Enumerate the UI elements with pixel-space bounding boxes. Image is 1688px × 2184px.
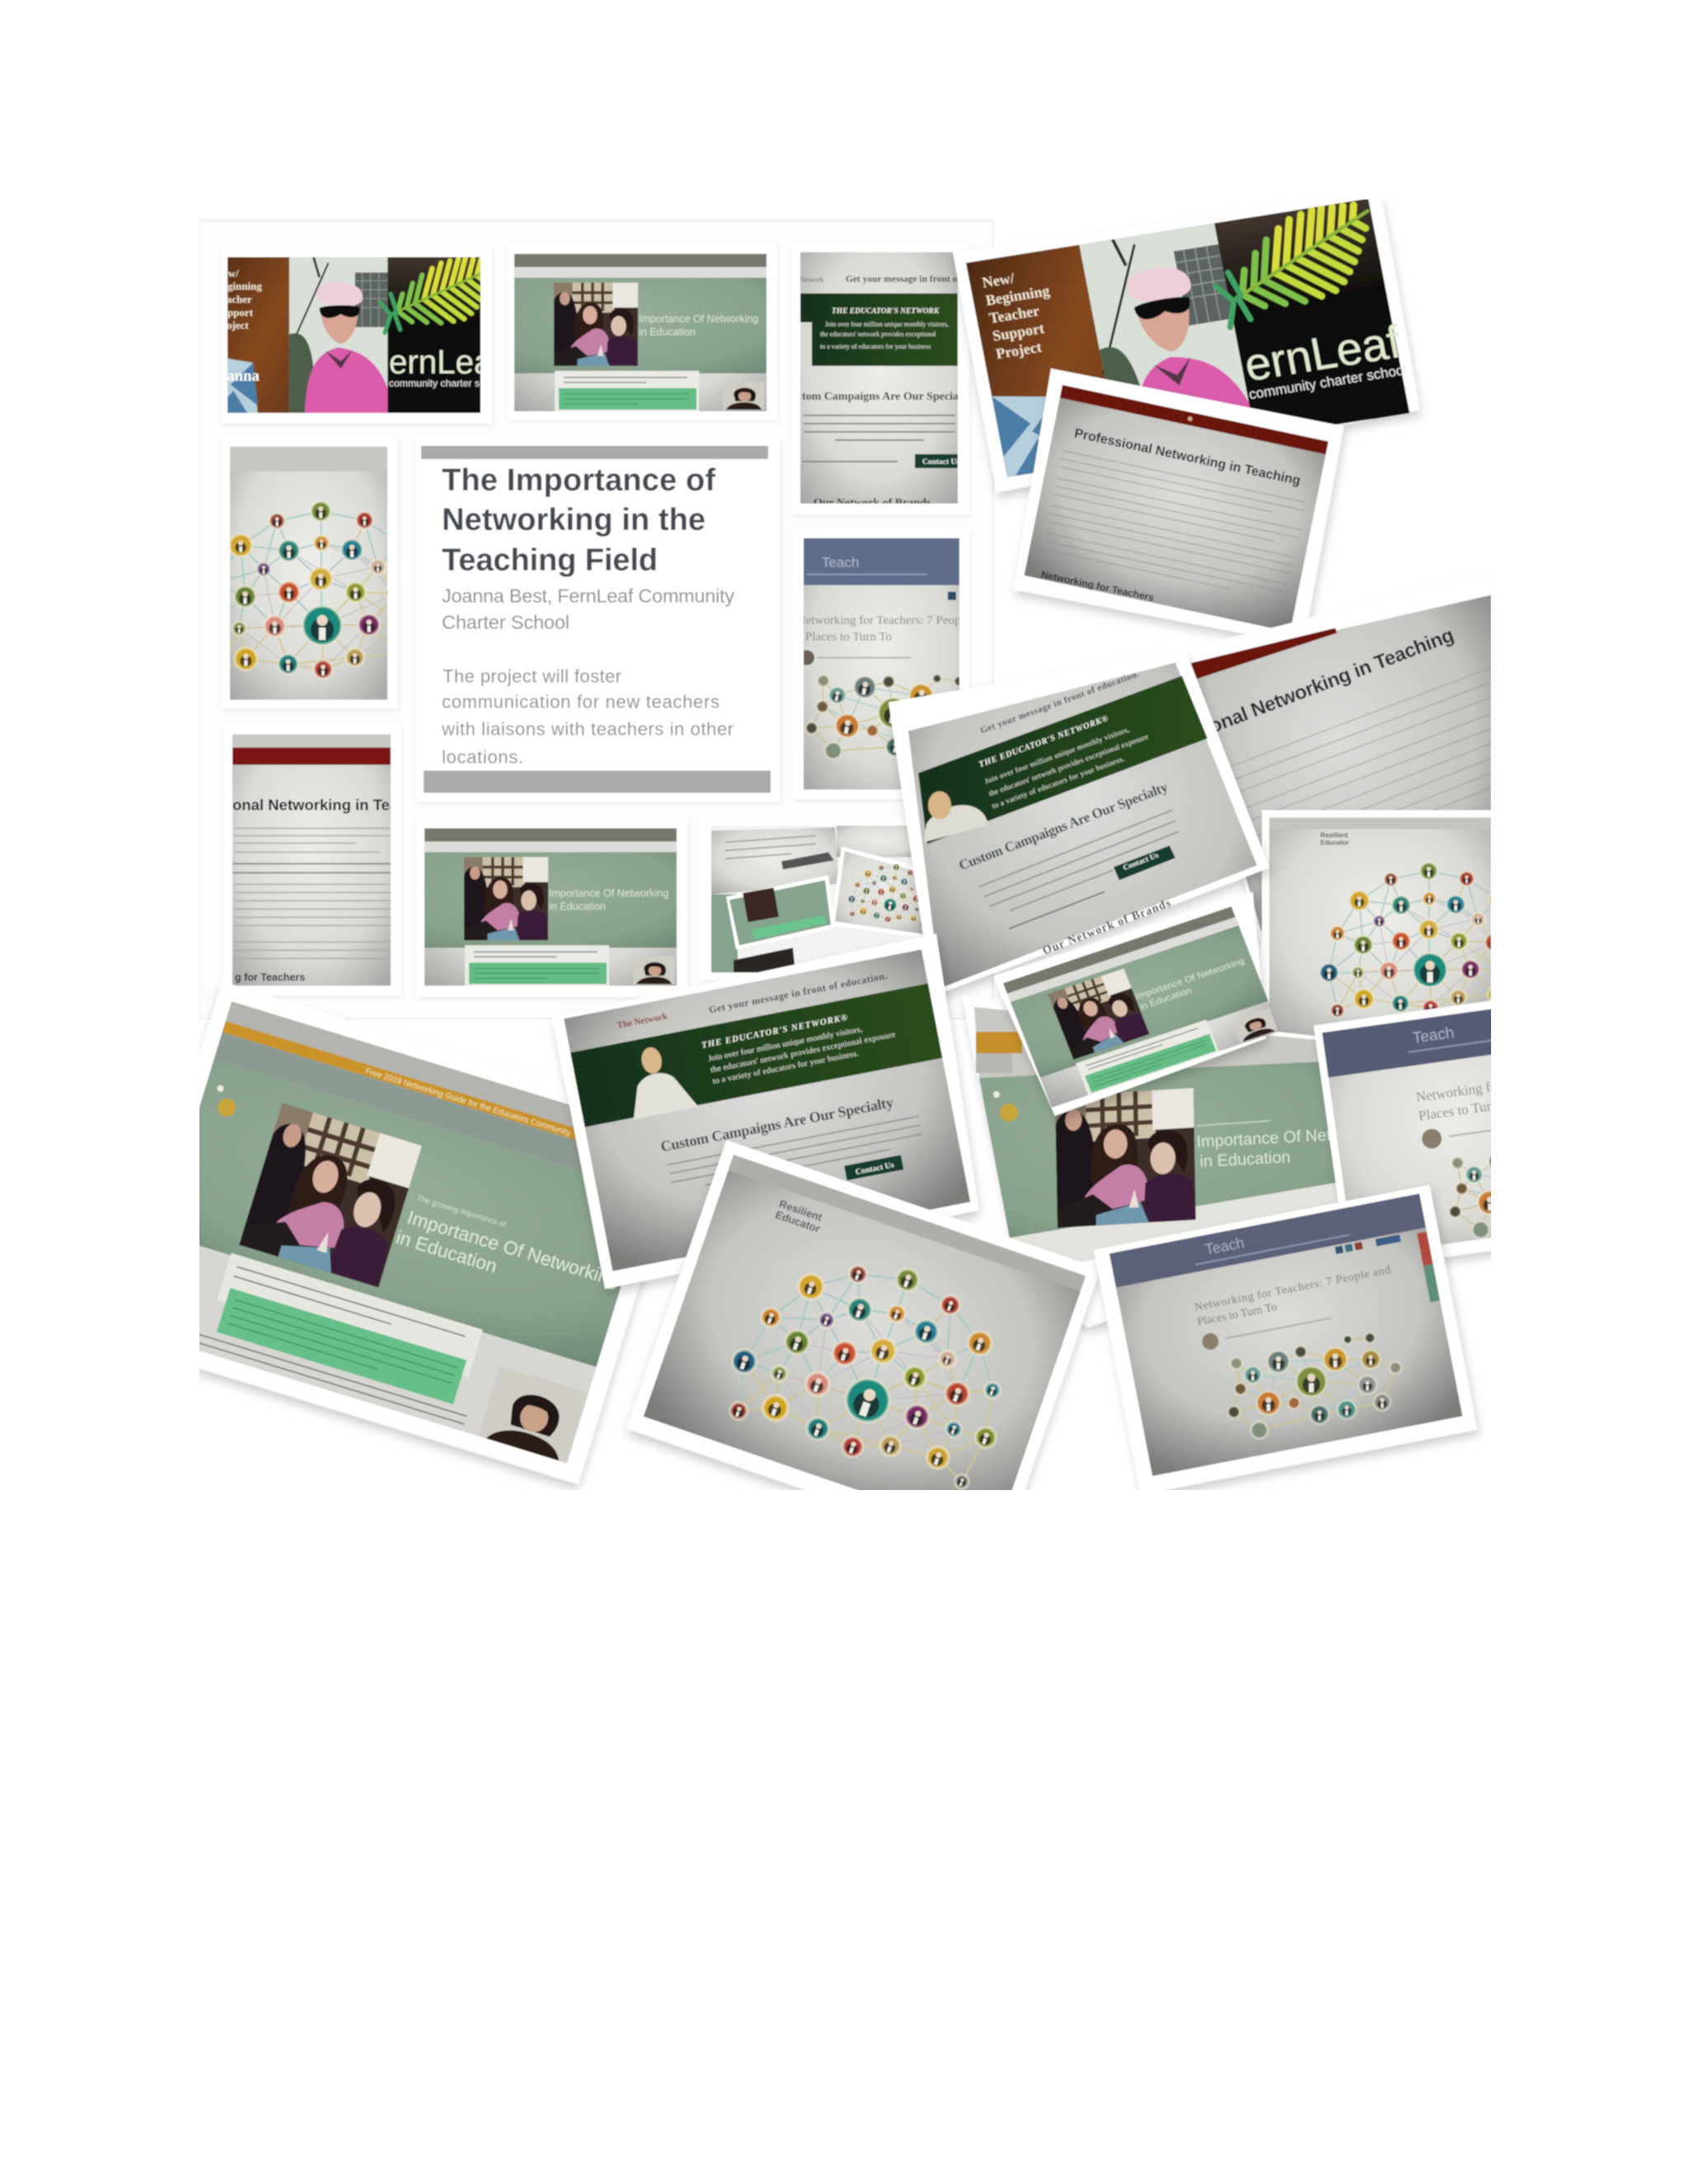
text: project description: with liaisons with teachers in other <box>441 719 734 739</box>
screenshot: The Educator's Network, tilted upper: to a variety of educators for your business. <box>991 754 1125 810</box>
screenshot: Professional Networking in Teaching, large crop: ional Networking in Teaching <box>1201 624 1457 740</box>
screenshot: Networking for Teachers, right: Networking for Teachers: 7 People and <box>1415 1059 1634 1105</box>
screenshot: The Educator's Network, lower tilted: the educators' network provides exceptional exposure <box>710 1030 897 1075</box>
screenshot tile: The Educator's Network, cropped: to a variety of educators for your business <box>820 343 931 350</box>
screenshot: The Educator's Network, lower tilted: Contact Us <box>855 1160 895 1177</box>
screenshot: The Educator's Network, lower tilted: Custom Campaigns Are Our Specialty <box>659 1094 894 1155</box>
screenshot tile: The Educator's Network, cropped: Network <box>800 276 823 284</box>
screenshot tile: The Educator's Network, cropped: tom Campaigns Are Our Specialty <box>802 391 972 403</box>
screenshot: The Educator's Network, lower tilted: THE EDUCATOR'S NETWORK® <box>701 1013 848 1051</box>
panel: base sheet of tiled slides <box>199 220 993 1019</box>
screenshot: The Educator's Network, lower tilted: Get your message in front of education. <box>708 970 889 1015</box>
screenshot: Importance of Networking, large behind: in Education <box>1199 1148 1291 1171</box>
screenshot: Importance of Networking, large behind: Importance Of Networking <box>1196 1123 1388 1151</box>
photo: FernLeaf selfie, tilted: ernLeaf <box>1240 315 1405 391</box>
text: author: Joanna Best, FernLeaf Community <box>442 585 734 607</box>
photo tile: FernLeaf selfie, flat: Joanna <box>212 368 260 385</box>
screenshot tile: Importance of Networking in Education: in Education <box>639 326 696 338</box>
screenshot: large network illustration: Resilient <box>777 1197 824 1224</box>
heading: title <box>442 463 715 578</box>
screenshot: Networking for Teachers, lower tilted: Places to Turn To <box>1196 1301 1278 1329</box>
photo: FernLeaf selfie, tilted: New/ <box>981 269 1016 291</box>
screenshot: The Educator's Network, tilted upper: Our Network of Brands <box>1041 897 1173 958</box>
screenshot: network illustration tile, right: Educator <box>1320 839 1349 846</box>
screenshot: The Educator's Network, tilted upper: THE EDUCATOR'S NETWORK® <box>978 715 1109 770</box>
icon: gold star <box>215 1096 238 1119</box>
photo tile: FernLeaf selfie, flat: Project <box>216 319 249 331</box>
text: project description: communication for new teachers <box>442 691 720 712</box>
photo tile: FernLeaf selfie, flat: ernLeaf <box>389 343 502 381</box>
screenshot: The Educator's Network, tilted upper: Contact Us <box>1122 851 1160 873</box>
panel: title card <box>415 437 781 802</box>
screenshot tile: The Educator's Network, cropped <box>799 251 959 504</box>
screenshot: Importance of Networking, large left <box>112 982 688 1483</box>
screenshot: Importance of Networking, large left: The growing importance of <box>415 1193 508 1230</box>
photo collage <box>199 199 1491 1490</box>
screenshot: Professional Networking in Teaching, tilted: Networking for Teachers <box>1040 569 1156 604</box>
photo: FernLeaf selfie, tilted: Project <box>995 339 1043 362</box>
screenshot tile: Networking for Teachers, cropped <box>803 537 960 790</box>
screenshot: The Educator's Network, lower tilted: Join over four million unique monthly visitors, <box>708 1025 863 1063</box>
photo: FernLeaf selfie, tilted: Support <box>992 320 1046 344</box>
screenshot: The Educator's Network, tilted upper <box>889 651 1269 996</box>
screenshot: Networking for Teachers, right <box>1314 982 1657 1277</box>
screenshot: Importance of Networking, large left: Importance Of Networking <box>405 1207 621 1291</box>
screenshot tile: The Educator's Network, cropped: Contact Us <box>922 458 959 466</box>
screenshot tile: red header document, cropped: g for Teachers <box>235 972 305 983</box>
heading: title: The Importance of <box>442 463 715 498</box>
screenshot: network illustration tile, right: Resilient <box>1320 832 1348 839</box>
screenshot: Importance of Networking, tilted small: in Education <box>1138 987 1193 1012</box>
screenshot: network illustration tile, right <box>1258 809 1491 1037</box>
photo: FernLeaf selfie, tilted: Beginning <box>984 283 1051 309</box>
screenshot: Importance of Networking, large behind <box>962 996 1388 1327</box>
photo tile: FernLeaf selfie, flat: Beginning <box>216 280 262 293</box>
screenshot tile: The Educator's Network, cropped: the educators' network provides exceptional <box>820 330 936 338</box>
icon: woman with laptop <box>924 791 989 842</box>
screenshot: Importance of Networking, tilted small <box>993 892 1280 1116</box>
screenshot: Networking for Teachers, lower tilted: Networking for Teachers: 7 People and <box>1193 1264 1392 1314</box>
screenshot tile: The Educator's Network, cropped: Our Network of Brands <box>814 497 931 509</box>
icon: woman with laptop <box>621 1040 698 1119</box>
screenshot tile: Importance of Networking, second copy: Importance Of Networking <box>549 888 668 899</box>
screenshot: The Educator's Network, lower tilted: The Network <box>617 1011 669 1031</box>
photo: FernLeaf selfie, tilted: community charter school <box>1248 362 1409 402</box>
screenshot tile: Networking for Teachers, cropped: Teach <box>822 555 859 570</box>
miniature collage tile <box>711 826 937 972</box>
screenshot tile: Networking for Teachers, cropped: Networking for Teachers: 7 People <box>797 614 970 627</box>
photo tile: FernLeaf selfie, flat: Support <box>216 306 254 318</box>
text: project description: The project will foster <box>443 666 621 687</box>
screenshot: The Educator's Network, tilted upper: Get your message in front of education. <box>979 669 1141 736</box>
screenshot: large network illustration: Educator <box>774 1208 822 1235</box>
screenshot: Importance of Networking, tilted small: Importance Of Networking <box>1134 957 1245 1001</box>
screenshot tile: Networking for Teachers, cropped: Places to Turn To <box>805 630 892 644</box>
photo: FernLeaf selfie, tilted <box>953 194 1419 492</box>
screenshot: The Educator's Network, lower tilted <box>552 934 978 1289</box>
screenshot: The Educator's Network, lower tilted: to a variety of educators for your business. <box>712 1049 860 1086</box>
screenshot: Importance of Networking, large left: Free 2019 Networking Guide for the Educators Community <box>364 1066 572 1138</box>
screenshot: The Educator's Network, tilted upper: the educators' network provides exceptional exposure <box>987 732 1149 798</box>
screenshot tile: The Educator's Network, cropped: Join over four million unique monthly visitors, <box>825 321 949 328</box>
screenshot tile: The Educator's Network, cropped: THE EDUCATOR'S NETWORK <box>832 307 940 316</box>
photo tile: FernLeaf selfie, flat: Teacher <box>216 293 252 305</box>
screenshot: large network illustration <box>627 1140 1100 1557</box>
icon: gold star <box>1000 1104 1018 1122</box>
screenshot: The Educator's Network, tilted upper: Custom Campaigns Are Our Specialty <box>957 779 1170 874</box>
heading: title: Teaching Field <box>442 543 658 578</box>
screenshot tile: red header document, cropped <box>232 733 392 987</box>
screenshot: Professional Networking in Teaching, tilted <box>1014 368 1343 644</box>
screenshot: The Educator's Network, tilted upper: Join over four million unique monthly visitors, <box>983 725 1130 785</box>
screenshot: Networking for Teachers, lower tilted: Teach <box>1203 1235 1245 1258</box>
screenshot tile: Importance of Networking in Education: Importance Of Networking <box>639 313 758 325</box>
photo tile: FernLeaf selfie, flat <box>227 256 481 414</box>
screenshot: Networking for Teachers, right: Places to Turn To <box>1418 1094 1517 1124</box>
screenshot: Professional Networking in Teaching, tilted: Professional Networking in Teaching <box>1073 426 1301 488</box>
screenshot: Importance of Networking, large left: in Education <box>394 1226 499 1277</box>
photo tile: FernLeaf selfie, flat: community charter school <box>389 377 504 389</box>
text: project description <box>441 666 734 767</box>
screenshot tile: red header document, cropped: onal Networking in Teaching <box>232 796 438 813</box>
text: author: Charter School <box>442 612 570 633</box>
screenshot: Networking for Teachers, right: Teach <box>1412 1024 1456 1047</box>
screenshot tile: Importance of Networking in Education <box>514 254 767 411</box>
screenshot: Professional Networking in Teaching, large crop <box>1179 573 1491 940</box>
text: project description: locations. <box>442 747 523 767</box>
screenshot tile: Importance of Networking, second copy <box>424 828 677 986</box>
screenshot tile: The Educator's Network, cropped: Get your message in front of education. <box>846 274 1005 284</box>
text: author <box>442 588 735 630</box>
screenshot tile: Importance of Networking, second copy: in Education <box>549 901 606 912</box>
network illustration tile, flat <box>229 447 388 701</box>
photo: FernLeaf selfie, tilted: Teacher <box>987 302 1041 326</box>
photo tile: FernLeaf selfie, flat: New/ <box>216 267 239 279</box>
heading: title: Networking in the <box>442 503 706 537</box>
screenshot: Networking for Teachers, lower tilted <box>1094 1185 1477 1494</box>
